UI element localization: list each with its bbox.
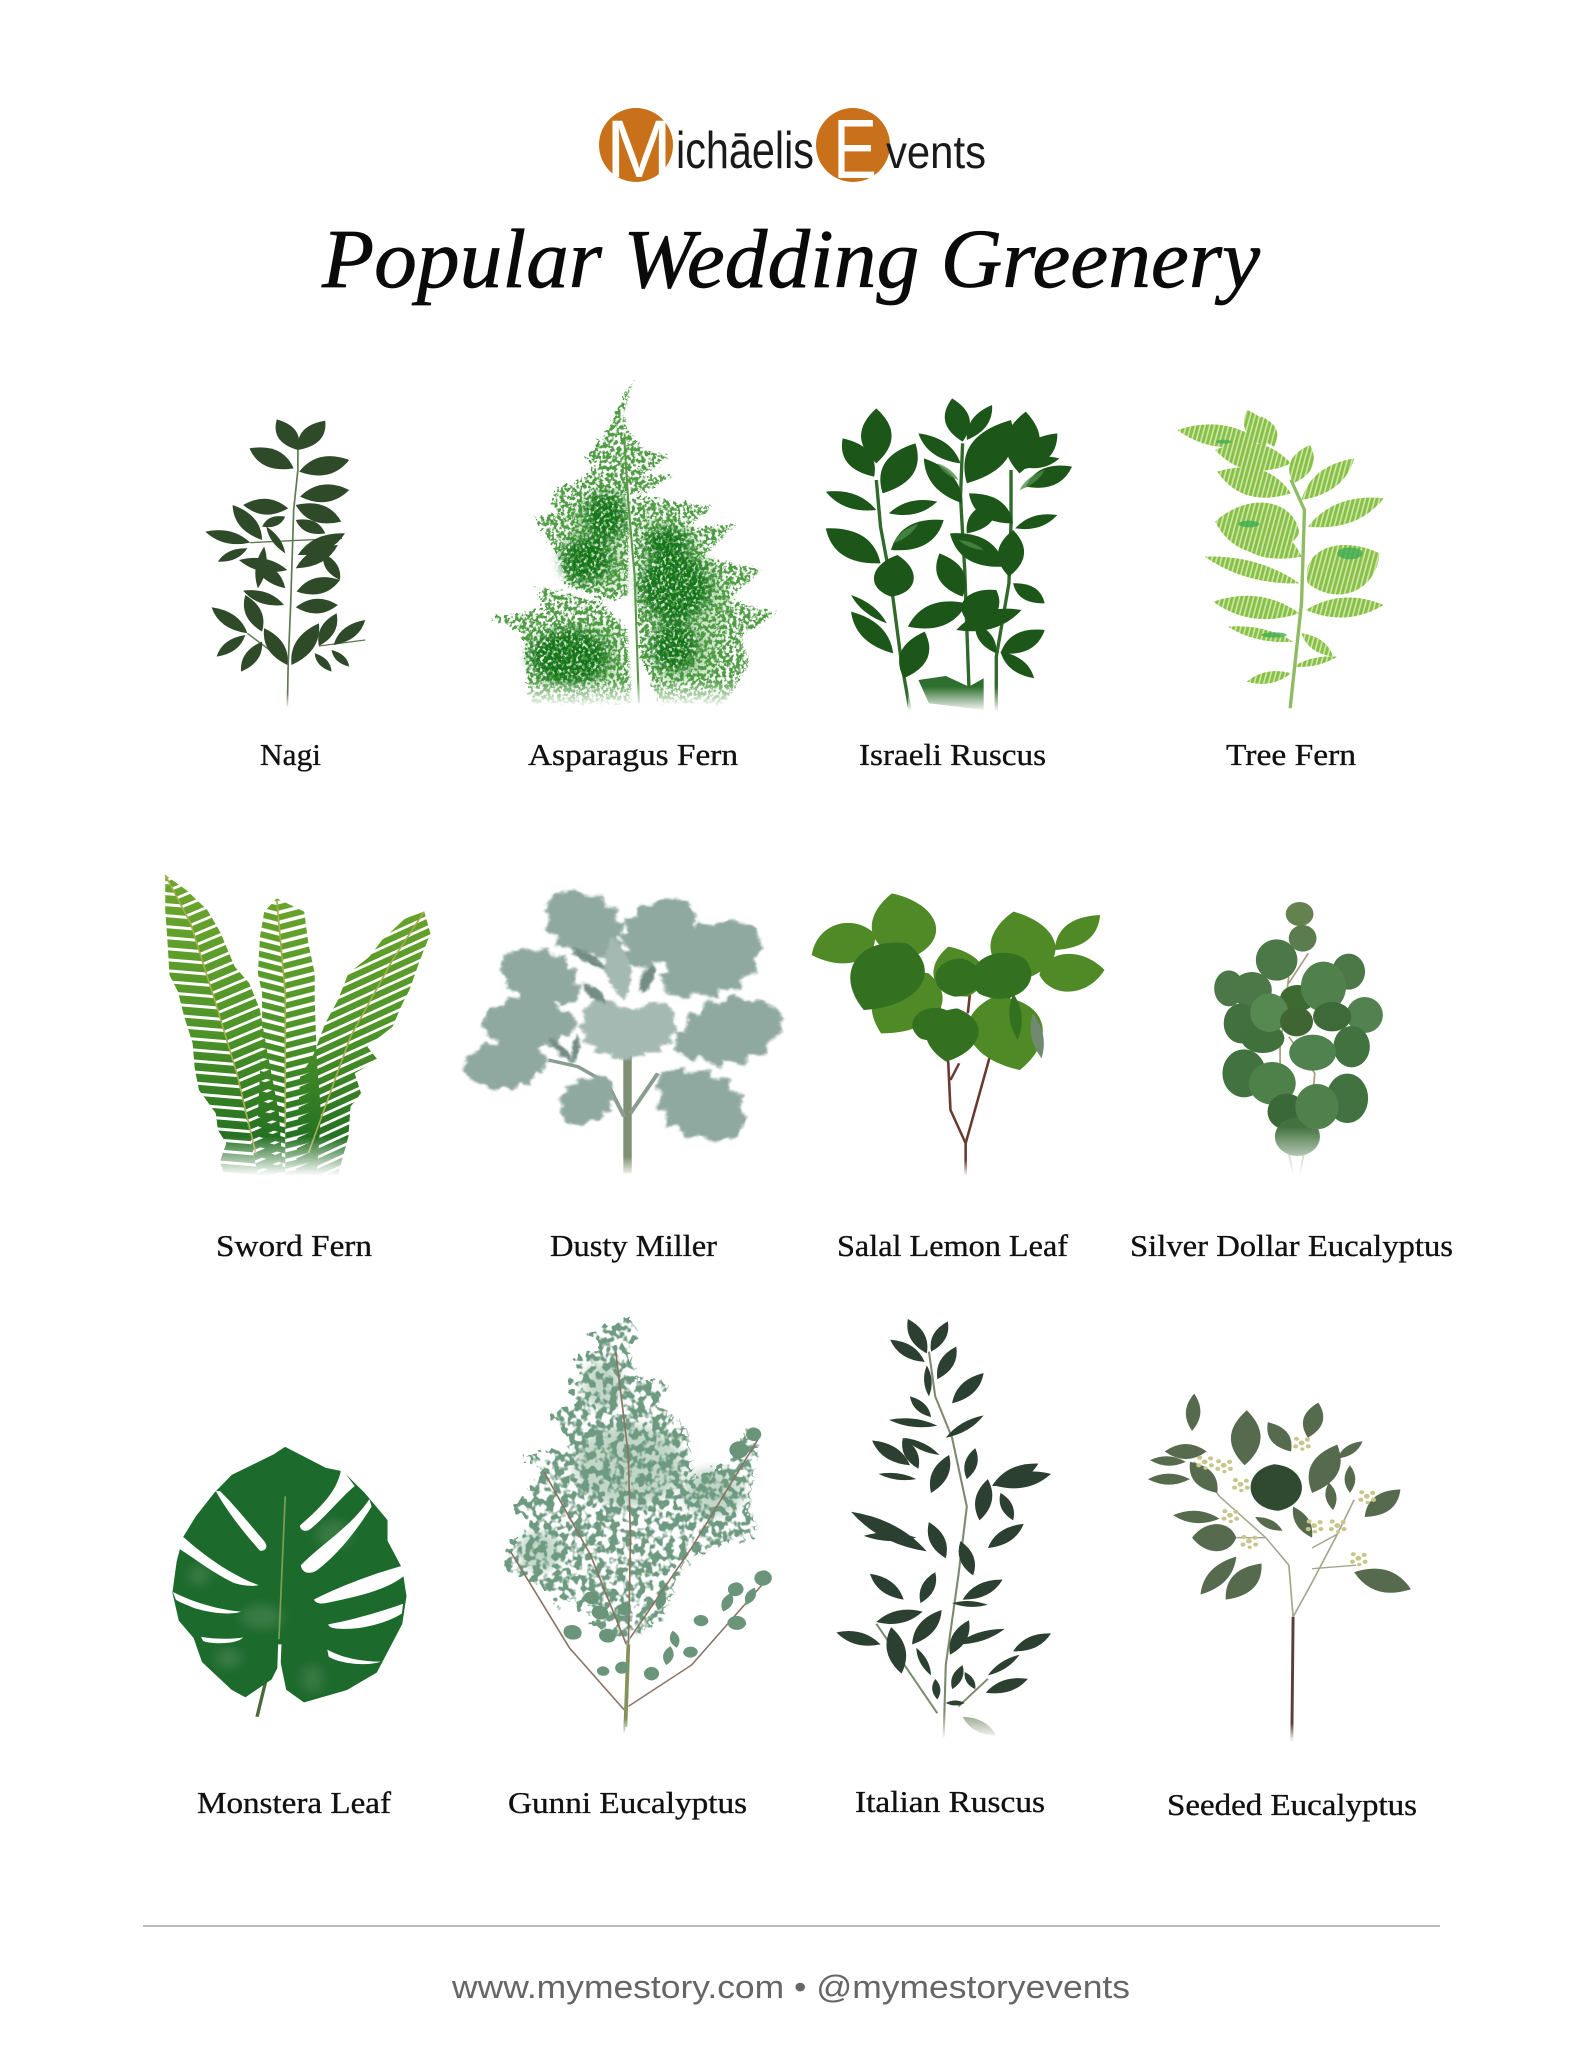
logo: Michaelis Events: E [833, 102, 877, 196]
plant: Monstera Leaf [173, 1448, 405, 1717]
logo: Michaelis Events: ichāelis [676, 122, 814, 180]
label: Asparagus Fern: Asparagus Fern [528, 737, 739, 772]
panel: Salal Lemon Leaf [801, 887, 1110, 1263]
label: Silver Dollar Eucalyptus: Silver Dollar Eucalyptus [1130, 1228, 1453, 1263]
plant: Silver Dollar Eucalyptus [1214, 902, 1383, 1176]
panel: Dusty Miller [457, 874, 801, 1263]
panel: Seeded Eucalyptus [1148, 1393, 1417, 1822]
label: Italian Ruscus: Italian Ruscus [855, 1784, 1045, 1819]
logo: Michaelis Events: vents [886, 126, 986, 178]
title: Popular Wedding Greenery [321, 213, 1261, 306]
footer: website and handle: www.mymestory.com • @mymestoryevents [451, 1969, 1130, 2005]
panel: Silver Dollar Eucalyptus [1130, 902, 1453, 1263]
panel: Israeli Ruscus [816, 396, 1078, 772]
plant: Tree Fern [1175, 407, 1394, 708]
plant: Dusty Miller [457, 874, 801, 1177]
panel: Italian Ruscus [834, 1316, 1055, 1819]
label: Nagi: Nagi [260, 737, 321, 772]
panel: Gunni Eucalyptus [504, 1317, 774, 1820]
label: Tree Fern: Tree Fern [1226, 737, 1357, 772]
panel: Asparagus Fern [485, 378, 778, 772]
label: Israeli Ruscus: Israeli Ruscus [859, 737, 1046, 772]
label: Gunni Eucalyptus: Gunni Eucalyptus [508, 1785, 747, 1820]
panel: Nagi [203, 416, 370, 772]
plant: Sword Fern [153, 867, 443, 1182]
plant: Gunni Eucalyptus [504, 1317, 774, 1736]
plant: Seeded Eucalyptus [1148, 1393, 1416, 1741]
label: Salal Lemon Leaf: Salal Lemon Leaf [837, 1228, 1069, 1263]
plant: Nagi [203, 416, 370, 708]
panel: Monstera Leaf [173, 1448, 405, 1820]
plant: Italian Ruscus [834, 1316, 1055, 1740]
plant: Israeli Ruscus [816, 396, 1078, 712]
label: Dusty Miller: Dusty Miller [550, 1228, 718, 1263]
plant: Salal Lemon Leaf [801, 887, 1110, 1176]
label: Monstera Leaf: Monstera Leaf [197, 1785, 392, 1820]
plant: Asparagus Fern [485, 378, 778, 708]
label: Sword Fern: Sword Fern [216, 1228, 373, 1263]
logo: Michaelis Events [599, 102, 986, 196]
logo: Michaelis Events: M [606, 104, 672, 195]
label: Seeded Eucalyptus: Seeded Eucalyptus [1167, 1787, 1417, 1822]
panel: Tree Fern [1175, 407, 1394, 772]
panel: Sword Fern [153, 867, 443, 1263]
